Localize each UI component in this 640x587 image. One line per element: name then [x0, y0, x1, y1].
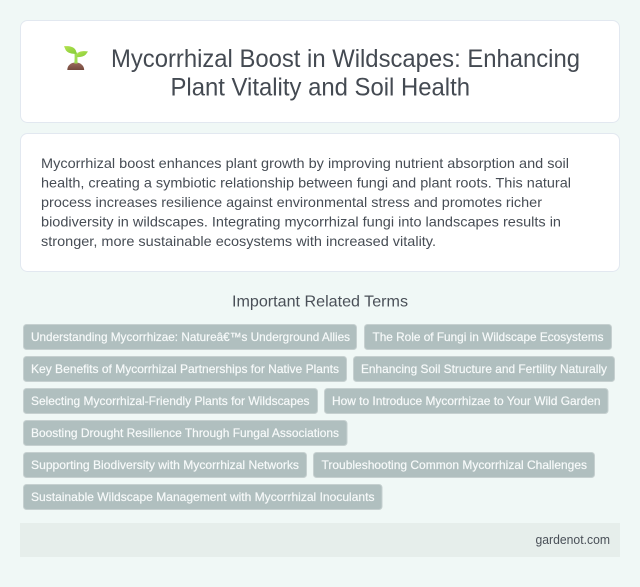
panel: header card	[20, 20, 620, 122]
tag: Selecting Mycorrhizal-Friendly Plants for Wildscapes	[31, 394, 310, 408]
description text: process increases resilience against environmental stress and promotes richer	[41, 194, 542, 210]
description text: Mycorrhizal boost enhances plant growth by improving nutrient absorption and soil	[41, 155, 569, 171]
tag: The Role of Fungi in Wildscape Ecosystems	[372, 330, 604, 344]
tag: Key Benefits of Mycorrhizal Partnerships for Native Plants	[31, 362, 339, 376]
tag: Enhancing Soil Structure and Fertility Naturally	[361, 362, 607, 376]
tag	[24, 356, 346, 382]
tag	[24, 420, 347, 446]
tag	[24, 452, 306, 478]
tag	[24, 388, 318, 414]
tag: How to Introduce Mycorrhizae to Your Wild Garden	[332, 394, 600, 408]
tag	[354, 356, 614, 382]
tag	[24, 484, 382, 510]
tag	[364, 324, 612, 350]
title	[111, 45, 580, 102]
title: Plant Vitality and Soil Health	[170, 74, 470, 102]
tag: Sustainable Wildscape Management with Mycorrhizal Inoculants	[31, 490, 374, 504]
icon: seedling	[64, 46, 88, 70]
title: Mycorrhizal Boost in Wildscapes: Enhancing	[111, 45, 580, 73]
panel: description	[20, 134, 620, 272]
footer	[20, 523, 620, 557]
tag: Understanding Mycorrhizae: Natureâ€™s Underground Allies	[31, 330, 350, 344]
description text: biodiversity in wildscapes. Integrating mycorrhizal fungi into landscapes results in	[41, 214, 561, 230]
tag	[314, 452, 594, 478]
tag: Troubleshooting Common Mycorrhizal Challenges	[322, 458, 587, 472]
tag list	[24, 324, 614, 510]
description text: stronger, more sustainable ecosystems with increased vitality.	[41, 233, 436, 249]
tag	[324, 388, 608, 414]
tag: Supporting Biodiversity with Mycorrhizal Networks	[31, 458, 299, 472]
description text	[41, 155, 571, 249]
tag	[24, 324, 356, 350]
tag: Boosting Drought Resilience Through Fungal Associations	[31, 426, 339, 440]
footer text: gardenot.com	[536, 533, 610, 547]
description text: health, creating a symbiotic relationship between fungi and plant roots. This natural	[41, 174, 571, 190]
heading: important related terms: Important Related Terms	[232, 294, 408, 310]
